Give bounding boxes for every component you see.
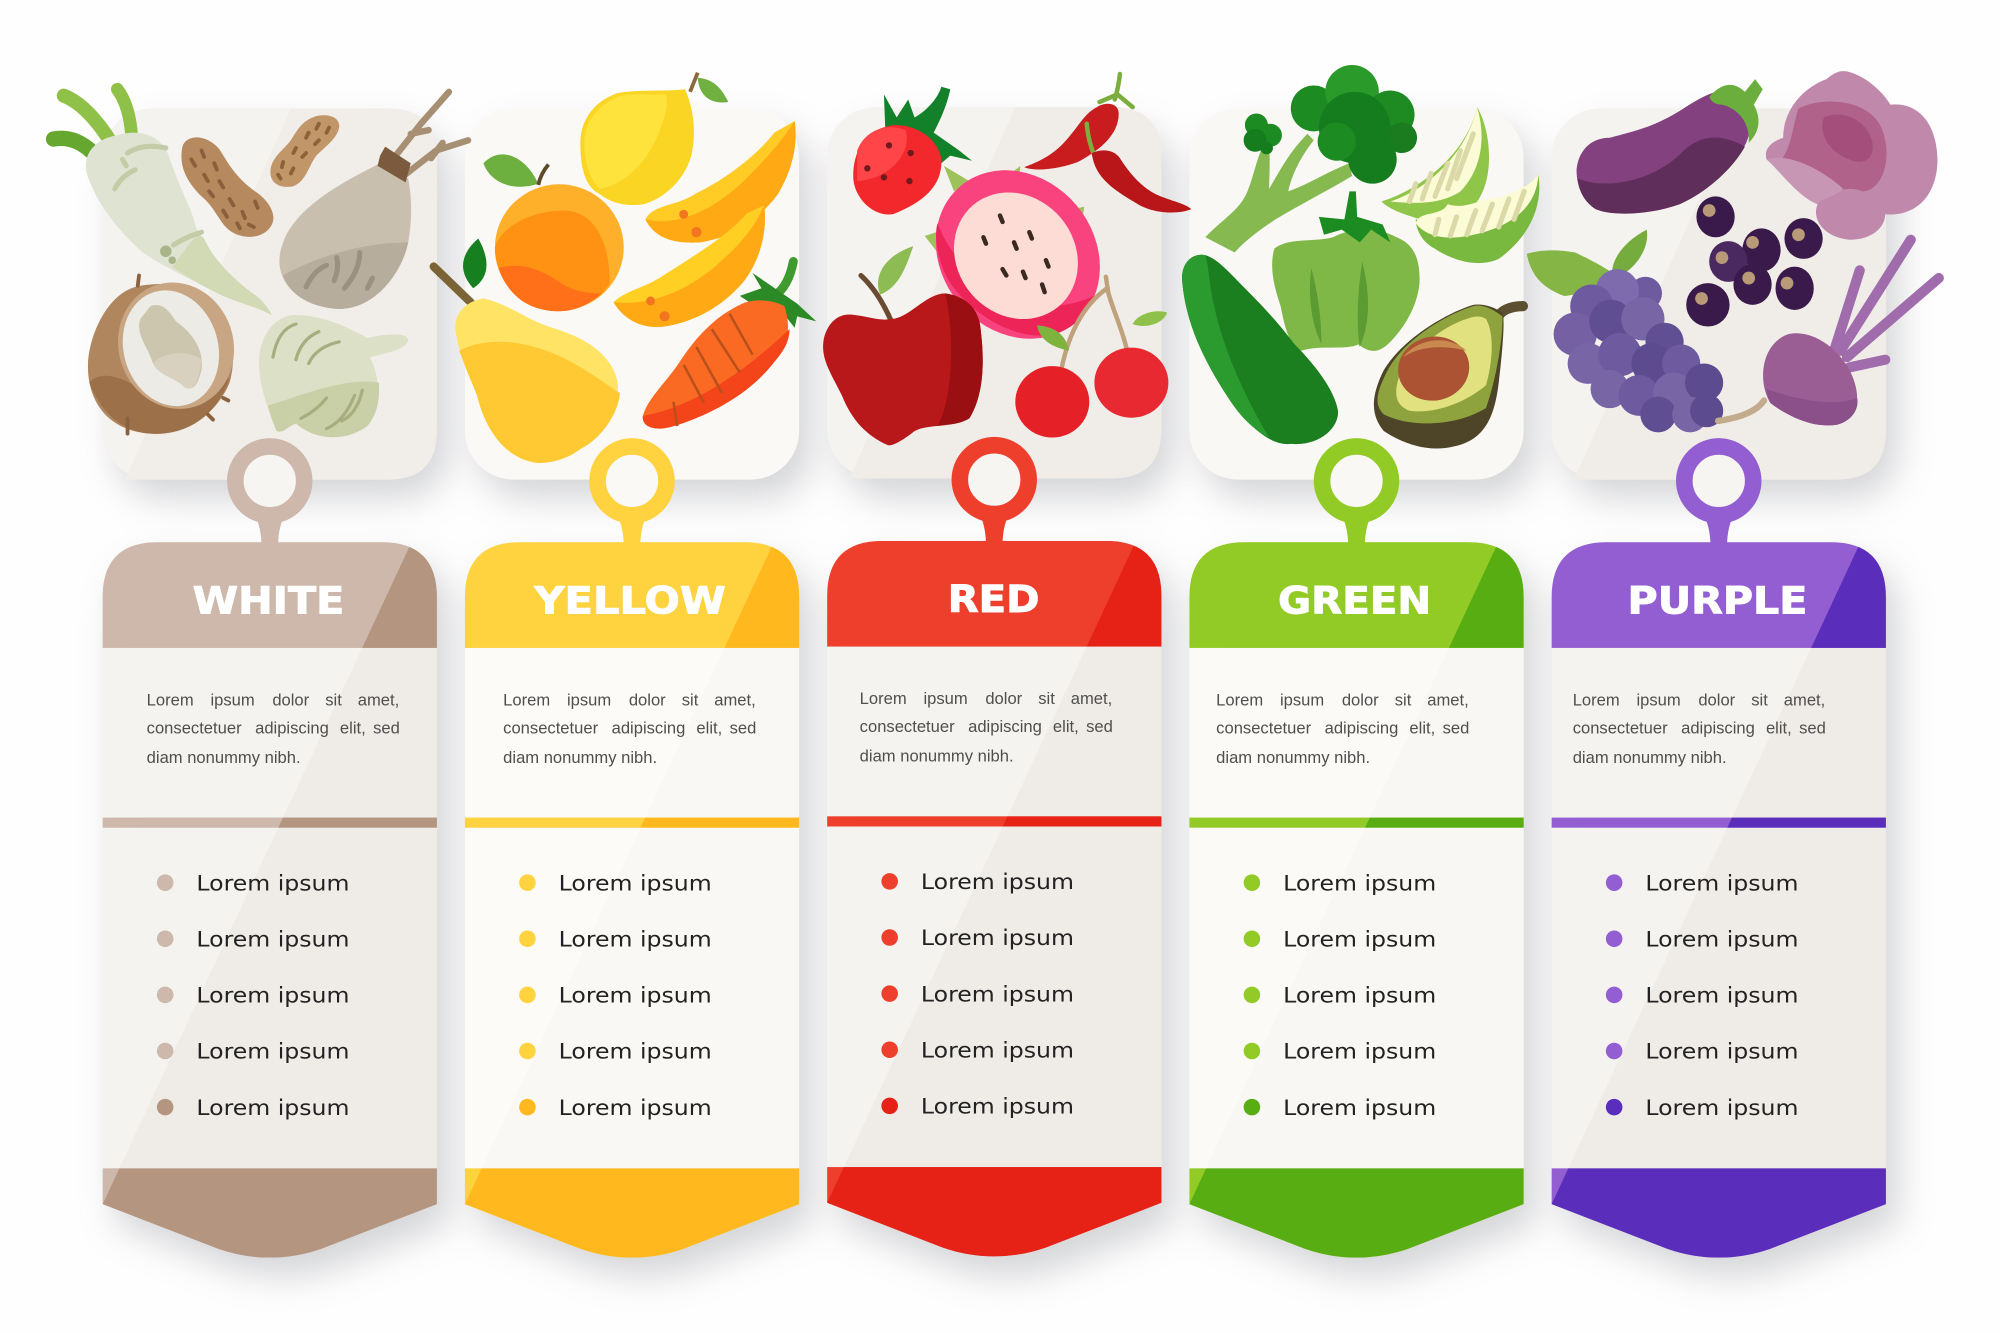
description text: consectetuer bbox=[1216, 718, 1312, 737]
card body bbox=[1176, 536, 1533, 1270]
hanger ring bbox=[960, 445, 1029, 545]
panel: purple foods backdrop bbox=[1552, 108, 1886, 480]
bullet list: Lorem ipsum bbox=[1283, 871, 1436, 896]
icon: garlic bulb bbox=[259, 315, 408, 437]
bullet list: Lorem ipsum bbox=[921, 1038, 1074, 1063]
icon: grape bunch bbox=[1527, 230, 1723, 432]
red foods illustration bbox=[823, 74, 1191, 445]
bullet list: Lorem ipsum bbox=[1645, 927, 1798, 952]
description text: adipiscing bbox=[968, 717, 1042, 736]
description text: sit bbox=[1751, 690, 1768, 709]
hanger ring bbox=[235, 446, 304, 546]
description text: consectetuer bbox=[503, 718, 599, 737]
icon: lime wedge lower bbox=[1416, 175, 1539, 263]
description text: diam nonummy nibh. bbox=[503, 748, 657, 767]
description text: amet, bbox=[1784, 690, 1825, 709]
description text: adipiscing bbox=[612, 718, 685, 737]
description text: sed bbox=[1443, 718, 1469, 737]
icon: chili upper bbox=[1024, 74, 1133, 169]
description text: sed bbox=[1799, 718, 1826, 737]
description text: amet, bbox=[714, 690, 756, 709]
yellow foods illustration bbox=[434, 73, 816, 463]
green foods illustration bbox=[1182, 65, 1539, 449]
description text: sit bbox=[325, 690, 342, 709]
card body bbox=[1538, 536, 1895, 1270]
card body bbox=[452, 536, 809, 1270]
icon: peanut small bbox=[270, 115, 339, 187]
description text: dolor bbox=[629, 690, 666, 709]
panel: red foods backdrop bbox=[827, 107, 1161, 478]
bullet list: Lorem ipsum bbox=[559, 871, 712, 896]
description text: Lorem bbox=[1573, 690, 1620, 709]
description text: adipiscing bbox=[255, 718, 329, 737]
icon: lime wedge upper bbox=[1381, 107, 1489, 224]
description text: diam nonummy nibh. bbox=[860, 746, 1014, 765]
description text: sed bbox=[730, 718, 756, 737]
panel: yellow foods backdrop bbox=[465, 108, 799, 480]
description text: ipsum bbox=[1636, 690, 1681, 709]
bullet list: Lorem ipsum bbox=[196, 927, 349, 952]
bullet list: Lorem ipsum bbox=[921, 870, 1074, 895]
card drop shadows bbox=[115, 128, 1899, 1277]
bullet list: Lorem ipsum bbox=[196, 871, 349, 896]
description text: dolor bbox=[985, 689, 1023, 708]
bullet list: Lorem ipsum bbox=[1283, 1096, 1436, 1121]
icon: eggplant bbox=[1577, 79, 1763, 214]
icon: orange with leaf bbox=[483, 154, 624, 311]
heading: RED: RED bbox=[948, 578, 1040, 621]
purple foods illustration bbox=[1527, 71, 1939, 432]
bullet list: Lorem ipsum bbox=[1283, 927, 1436, 952]
icon: lemon bbox=[580, 73, 728, 205]
bullet list bbox=[1244, 871, 1436, 1121]
icon: coconut half bbox=[88, 267, 250, 434]
description text: sed bbox=[1086, 717, 1113, 736]
description text: diam nonummy nibh. bbox=[147, 748, 301, 767]
bullet list: Lorem ipsum bbox=[921, 982, 1074, 1007]
hanger ring bbox=[1684, 446, 1753, 546]
description text: sit bbox=[682, 690, 699, 709]
bullet list: Lorem ipsum bbox=[559, 1040, 712, 1065]
bullet list: Lorem ipsum bbox=[1283, 1040, 1436, 1065]
column: PURPLE bbox=[1538, 446, 1895, 1270]
panel: white foods backdrop bbox=[103, 108, 437, 480]
bullet list: Lorem ipsum bbox=[559, 927, 712, 952]
description text: consectetuer bbox=[860, 717, 955, 736]
bullet list: Lorem ipsum bbox=[1645, 984, 1798, 1009]
icon: cucumber bbox=[1182, 255, 1338, 444]
icon: dragon fruit bbox=[902, 137, 1134, 372]
icon: green bell pepper bbox=[1272, 191, 1420, 351]
description text: dolor bbox=[272, 690, 310, 709]
icon: red cabbage bbox=[1766, 71, 1937, 240]
icon: banana slice upper bbox=[645, 121, 796, 243]
icon: apple bbox=[823, 246, 983, 445]
description text: sit bbox=[1395, 690, 1412, 709]
bullet list: Lorem ipsum bbox=[921, 1095, 1074, 1120]
card body bbox=[89, 536, 446, 1270]
bullet list bbox=[881, 870, 1074, 1120]
icon: banana slice lower bbox=[614, 205, 765, 327]
heading: GREEN: GREEN bbox=[1278, 580, 1431, 623]
bullet list: Lorem ipsum bbox=[921, 926, 1074, 951]
description text: sit bbox=[1038, 689, 1055, 708]
bullet list: Lorem ipsum bbox=[1645, 871, 1798, 896]
bullet list: Lorem ipsum bbox=[1645, 1040, 1798, 1065]
description text: ipsum bbox=[923, 689, 968, 708]
icon: beetroot bbox=[1718, 240, 1939, 425]
bullet list: Lorem ipsum bbox=[559, 984, 712, 1009]
description text: ipsum bbox=[210, 690, 255, 709]
icon: bulb root with twigs bbox=[279, 92, 468, 309]
description text: Lorem bbox=[1216, 690, 1263, 709]
description text: Lorem bbox=[147, 690, 194, 709]
bullet list: Lorem ipsum bbox=[1645, 1096, 1798, 1121]
icon: pear with leaf bbox=[434, 239, 620, 463]
bullet list: Lorem ipsum bbox=[196, 1040, 349, 1065]
icon: acai berries bbox=[1686, 196, 1823, 327]
heading: WHITE: WHITE bbox=[193, 580, 344, 623]
description text: amet, bbox=[1427, 690, 1469, 709]
description text: elit, bbox=[1053, 717, 1079, 736]
description text: consectetuer bbox=[147, 718, 242, 737]
description text: adipiscing bbox=[1681, 718, 1755, 737]
description text: diam nonummy nibh. bbox=[1573, 748, 1727, 767]
description text: adipiscing bbox=[1325, 718, 1398, 737]
food photo panels bbox=[103, 107, 1886, 480]
hanger ring bbox=[598, 446, 666, 546]
description text: Lorem bbox=[503, 690, 550, 709]
icon: avocado bbox=[1374, 305, 1523, 449]
description text: ipsum bbox=[1280, 690, 1324, 709]
bullet list: Lorem ipsum bbox=[196, 1096, 349, 1121]
description text: diam nonummy nibh. bbox=[1216, 748, 1370, 767]
icon: broccoli bbox=[1205, 65, 1417, 253]
bullet list: Lorem ipsum bbox=[559, 1096, 712, 1121]
icon: strawberry bbox=[853, 87, 972, 215]
icon: carrot bbox=[643, 261, 816, 429]
description text: amet, bbox=[1071, 689, 1112, 708]
column: GREEN bbox=[1176, 446, 1533, 1270]
bullet list: Lorem ipsum bbox=[196, 984, 349, 1009]
column: WHITE bbox=[89, 446, 446, 1270]
description text: Lorem bbox=[860, 689, 907, 708]
bullet list bbox=[519, 871, 712, 1121]
description text: elit, bbox=[340, 718, 366, 737]
description text: sed bbox=[373, 718, 400, 737]
panel: green foods backdrop bbox=[1189, 108, 1524, 480]
icon: chili lower bbox=[1087, 124, 1191, 213]
icon: peanut large bbox=[181, 137, 273, 237]
heading: PURPLE: PURPLE bbox=[1628, 580, 1807, 623]
icon: daikon radish bbox=[54, 89, 272, 315]
column: YELLOW bbox=[452, 446, 809, 1270]
description text: elit, bbox=[696, 718, 722, 737]
hanger ring bbox=[1322, 446, 1391, 546]
card body bbox=[814, 534, 1171, 1269]
description text: dolor bbox=[1342, 690, 1379, 709]
bullet list bbox=[157, 871, 349, 1121]
description text: amet, bbox=[358, 690, 399, 709]
heading: YELLOW: YELLOW bbox=[533, 580, 726, 623]
description text: consectetuer bbox=[1573, 718, 1668, 737]
bullet list: Lorem ipsum bbox=[1283, 984, 1436, 1009]
description text: ipsum bbox=[567, 690, 611, 709]
column: RED bbox=[814, 445, 1171, 1269]
description text: elit, bbox=[1766, 718, 1792, 737]
icon: cherries bbox=[1015, 277, 1168, 437]
white foods illustration bbox=[54, 89, 468, 437]
bullet list bbox=[1606, 871, 1798, 1121]
description text: dolor bbox=[1698, 690, 1736, 709]
description text: elit, bbox=[1409, 718, 1435, 737]
